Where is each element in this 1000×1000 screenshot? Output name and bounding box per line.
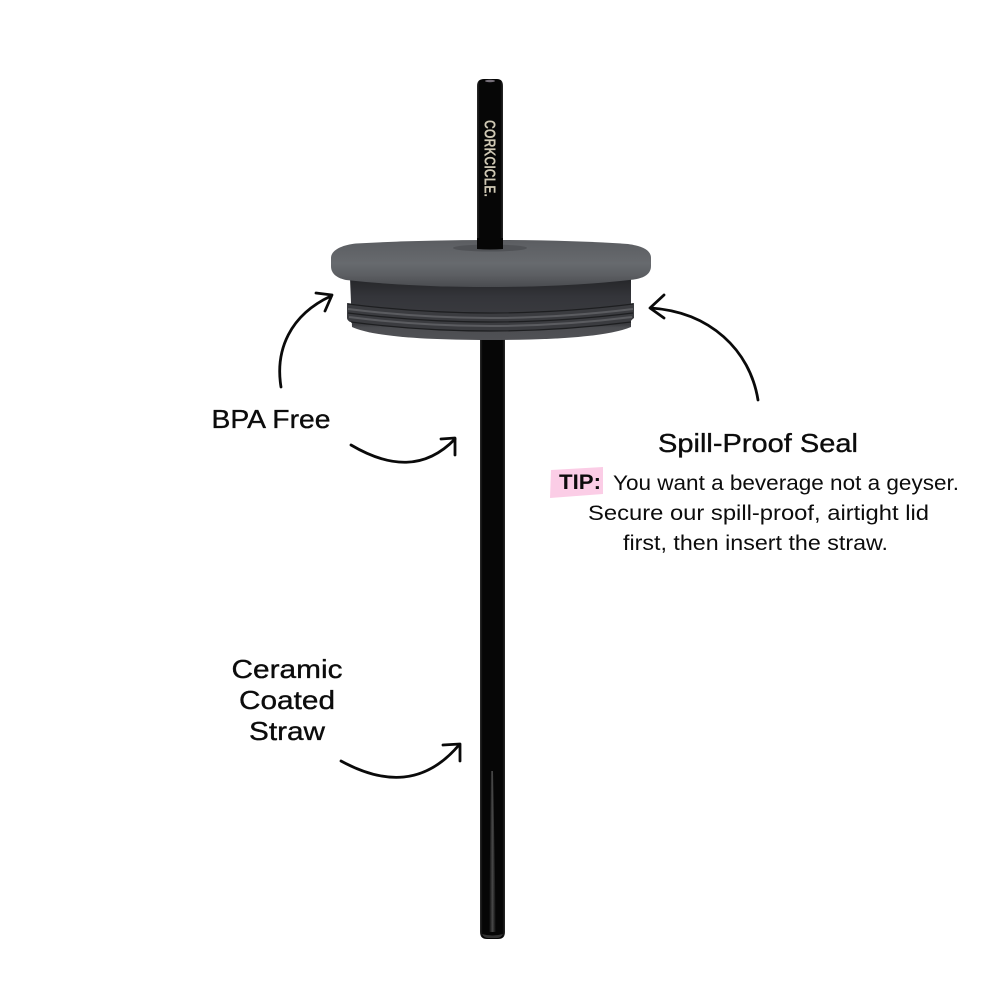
label: Ceramic Coated Straw: Ceramic [232, 654, 342, 684]
arrow: Ceramic Coated Straw to straw [341, 744, 460, 777]
tip text: Secure our spill-proof, airtight lid [588, 501, 929, 525]
lid cap [331, 240, 651, 287]
label: BPA Free: BPA Free [212, 404, 330, 434]
heading: Spill-Proof Seal: Spill-Proof Seal [658, 428, 858, 458]
tip highlight [550, 467, 603, 498]
lid threaded base [347, 278, 634, 340]
tip label: TIP: [559, 471, 601, 494]
label: Ceramic Coated Straw: Straw [249, 716, 325, 746]
arrow: BPA Free to straw [351, 438, 455, 462]
lower straw [480, 335, 505, 939]
arrow: Spill-Proof Seal to lid [650, 295, 758, 400]
callout: Spill-Proof Seal [550, 428, 959, 555]
tip text [588, 471, 959, 555]
tip text: You want a beverage not a geyser. [613, 471, 959, 495]
straw logo text: CORKCICLE. [480, 120, 498, 197]
lid [331, 238, 651, 340]
upper straw with logo [477, 79, 503, 252]
arrow: BPA Free to lid [280, 293, 332, 387]
tip text: first, then insert the straw. [623, 531, 888, 555]
label: Ceramic Coated Straw [232, 654, 342, 746]
label: Ceramic Coated Straw: Coated [239, 685, 335, 715]
